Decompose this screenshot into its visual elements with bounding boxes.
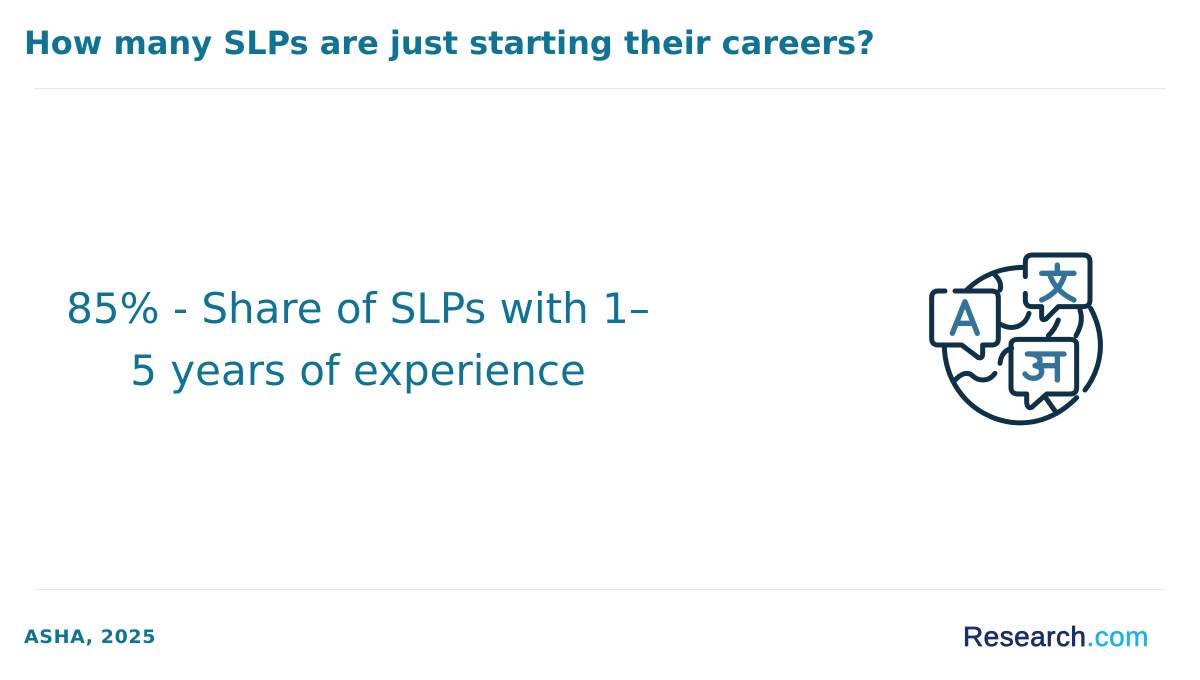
main statistic text: 5 years of experience	[130, 346, 586, 395]
main statistic text: 85% - Share of SLPs with 1–	[66, 284, 650, 333]
main statistic text	[66, 284, 650, 395]
source label: ASHA, 2025	[24, 626, 156, 648]
icon: globe with translation speech bubbles	[929, 252, 1103, 426]
logo: Research.com: Research.com	[963, 621, 1149, 652]
title: How many SLPs are just starting their careers?	[24, 24, 875, 62]
